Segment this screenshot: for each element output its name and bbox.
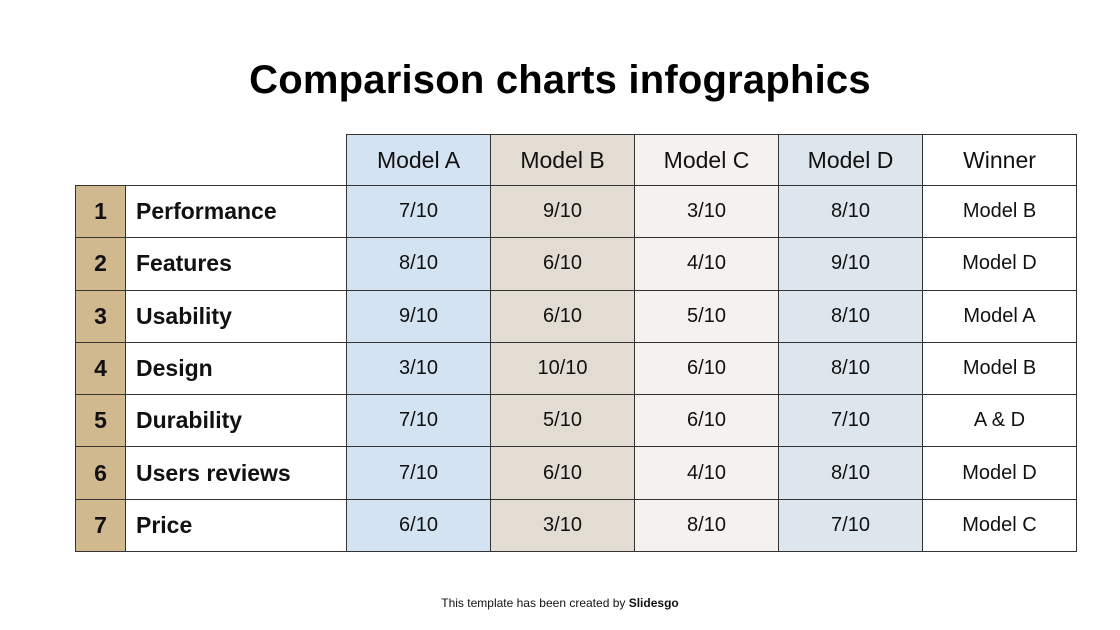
comparison table: 5/10: [543, 409, 582, 431]
comparison table: A & D: [974, 409, 1025, 431]
title: Comparison charts infographics: [249, 58, 871, 102]
comparison table: 6/10: [543, 252, 582, 274]
comparison table: 2: [94, 250, 107, 276]
comparison table: Model B: [963, 200, 1036, 222]
comparison table: 8/10: [831, 200, 870, 222]
comparison table: Model C: [664, 146, 749, 172]
comparison table: 6/10: [543, 462, 582, 484]
comparison table: 6/10: [687, 409, 726, 431]
comparison table: Users reviews: [136, 460, 291, 486]
comparison table: Model D: [962, 252, 1037, 274]
comparison table: 7/10: [831, 514, 870, 536]
comparison table: 6/10: [543, 305, 582, 327]
comparison table: 9/10: [831, 252, 870, 274]
comparison table: 4/10: [687, 462, 726, 484]
comparison table: 5/10: [687, 305, 726, 327]
comparison table: 4/10: [687, 252, 726, 274]
comparison table: 1: [94, 198, 107, 224]
comparison table: 6/10: [687, 357, 726, 379]
comparison table: Performance: [136, 198, 277, 224]
comparison table: 8/10: [831, 357, 870, 379]
comparison table: 3/10: [399, 357, 438, 379]
comparison table: 8/10: [687, 514, 726, 536]
comparison table: Model A: [963, 305, 1036, 327]
comparison table: 10/10: [537, 357, 588, 379]
comparison table: Model B: [520, 146, 605, 172]
comparison table: 7: [94, 512, 107, 538]
comparison table: 4: [94, 355, 107, 381]
comparison table: 7/10: [399, 200, 438, 222]
comparison table: Model C: [962, 514, 1037, 536]
comparison table: 7/10: [831, 409, 870, 431]
comparison table: 8/10: [831, 462, 870, 484]
comparison table: 8/10: [831, 305, 870, 327]
comparison table: Model D: [808, 146, 893, 172]
comparison table: [75, 134, 1077, 552]
comparison table: Design: [136, 355, 213, 381]
comparison table: 3/10: [687, 200, 726, 222]
footer credit: This template has been created by Slidesgo: [441, 596, 679, 610]
comparison table: 7/10: [399, 409, 438, 431]
comparison table: 6: [94, 460, 107, 486]
comparison table: 5: [94, 407, 107, 433]
comparison table: 6/10: [399, 514, 438, 536]
comparison table: Winner: [963, 146, 1036, 172]
comparison table: Model B: [963, 357, 1036, 379]
comparison table: 7/10: [399, 462, 438, 484]
comparison table: 8/10: [399, 252, 438, 274]
comparison table: 3/10: [543, 514, 582, 536]
comparison table: Durability: [136, 407, 242, 433]
comparison table: Model A: [377, 146, 460, 172]
comparison table: Model D: [962, 462, 1037, 484]
comparison table: Price: [136, 512, 192, 538]
comparison table: 9/10: [543, 200, 582, 222]
comparison table: 3: [94, 303, 107, 329]
comparison table: 9/10: [399, 305, 438, 327]
comparison table: Usability: [136, 303, 232, 329]
comparison table: Features: [136, 250, 232, 276]
